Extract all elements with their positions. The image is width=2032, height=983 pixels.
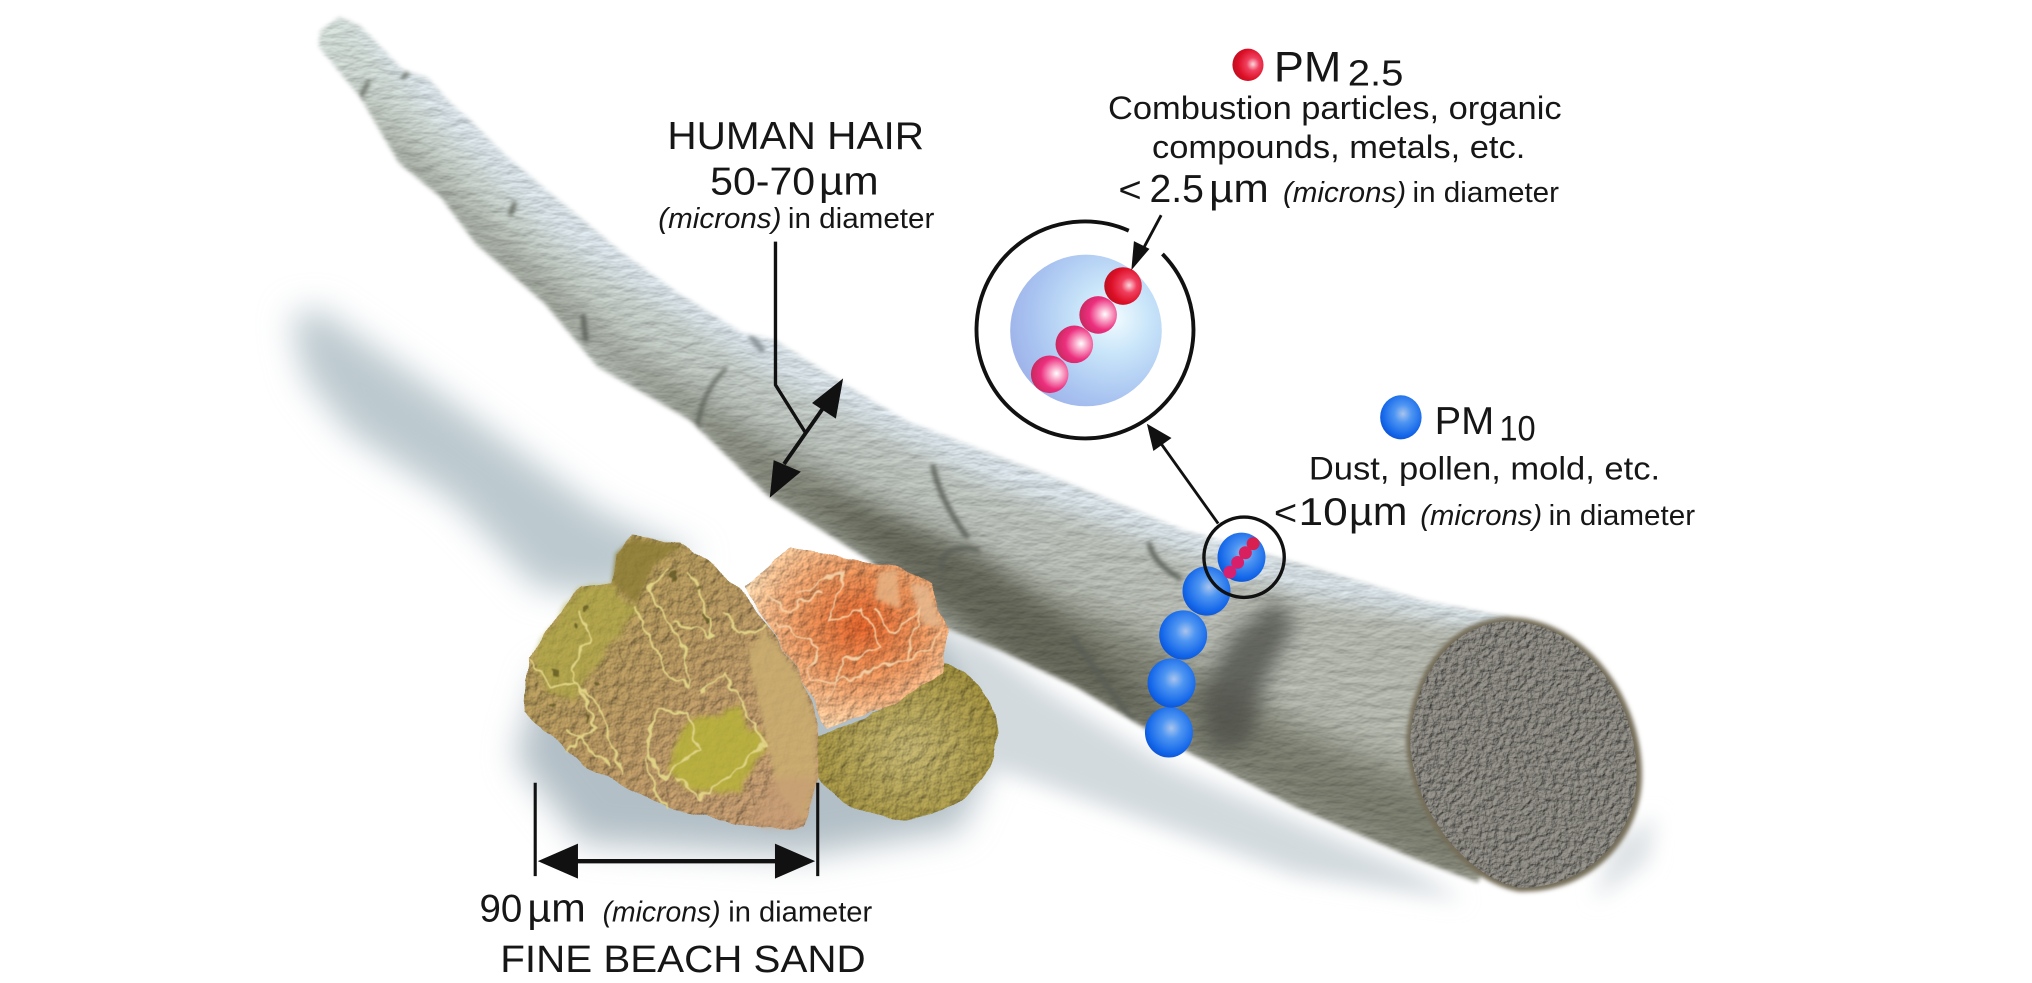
sphere shadow on hair	[1199, 599, 1296, 752]
label: fine beach sand: FINE BEACH SAND	[500, 938, 866, 980]
enlarged ring	[976, 221, 1193, 438]
arrow: small circle to enlarged view	[1147, 424, 1218, 524]
legend: PM2.5	[1108, 44, 1562, 211]
magnifier small circle	[1204, 517, 1284, 597]
legend: PM10	[1274, 395, 1696, 534]
legend: PM2.5: 2.5	[1348, 53, 1403, 94]
hair diameter leader and double arrow	[770, 242, 843, 498]
label: fine beach sand: 90	[479, 887, 522, 930]
PM2.5 bead	[1079, 296, 1117, 334]
legend: PM10: (microns)	[1420, 500, 1542, 532]
PM10 sphere	[1159, 610, 1207, 660]
legend: PM10: <	[1274, 492, 1297, 533]
fine beach sand grains	[524, 537, 997, 829]
label: fine beach sand: (microns)	[603, 896, 721, 928]
label: fine beach sand: µm	[527, 885, 586, 930]
legend: PM10: in diameter	[1549, 500, 1696, 532]
legend: PM2.5: (microns)	[1283, 177, 1406, 209]
hair lower shade	[319, 52, 1490, 894]
human hair strand	[317, 16, 1510, 884]
legend: PM2.5: in diameter	[1413, 177, 1560, 209]
PM2.5 bead	[1031, 355, 1068, 393]
label: human hair: (microns)	[658, 203, 781, 235]
label: fine beach sand	[479, 885, 873, 980]
label: human hair: HUMAN HAIR	[667, 115, 924, 158]
grain pits	[548, 574, 709, 722]
hair contact shade	[820, 491, 1162, 727]
ground shadows	[292, 308, 1656, 901]
PM2.5 bead	[1056, 326, 1093, 363]
legend: PM2.5: Combustion particles, organic	[1108, 90, 1562, 126]
label: human hair: µm	[819, 158, 879, 203]
hair upper highlight	[342, 10, 1516, 635]
icon: blue sphere	[1380, 395, 1422, 439]
sand diameter dimension arrow	[535, 783, 818, 879]
grain: large	[524, 537, 819, 829]
legend: PM2.5: PM	[1274, 44, 1341, 92]
legend: PM10: Dust, pollen, mold, etc.	[1309, 451, 1660, 487]
PM10 particle chain on hair	[1145, 533, 1265, 757]
PM10 sphere	[1148, 658, 1195, 708]
PM2.5 bead, red	[1104, 267, 1142, 305]
grain ridges	[529, 570, 765, 810]
label: human hair: 50-70	[710, 160, 815, 203]
grain: orange	[744, 547, 947, 730]
PM10 sphere with PM2.5 beads	[1218, 533, 1265, 582]
label: human hair: in diameter	[788, 203, 935, 235]
legend: PM10: µm	[1349, 489, 1407, 534]
label: fine beach sand: in diameter	[728, 896, 873, 928]
arrow: PM2.5 label to bead	[1131, 215, 1161, 270]
legend: PM2.5: 2.5	[1149, 168, 1204, 211]
hair cut end	[1406, 617, 1642, 892]
legend: PM2.5: <	[1118, 169, 1142, 210]
PM10 sphere	[1183, 566, 1230, 616]
legend: PM2.5: compounds, metals, etc.	[1152, 129, 1525, 165]
legend: PM10: 10	[1299, 491, 1348, 534]
legend: PM10: 10	[1499, 410, 1536, 449]
icon: red sphere	[1232, 49, 1264, 81]
enlarged PM10 view	[976, 221, 1193, 438]
grain: olive	[819, 664, 997, 820]
cuticle scale lines	[360, 71, 1179, 721]
PM10 sphere	[1145, 707, 1193, 757]
legend: PM2.5: µm	[1209, 166, 1269, 211]
legend: PM10: PM	[1435, 400, 1494, 443]
enlarged PM10 particle	[1010, 255, 1162, 406]
label: human hair	[658, 115, 935, 235]
